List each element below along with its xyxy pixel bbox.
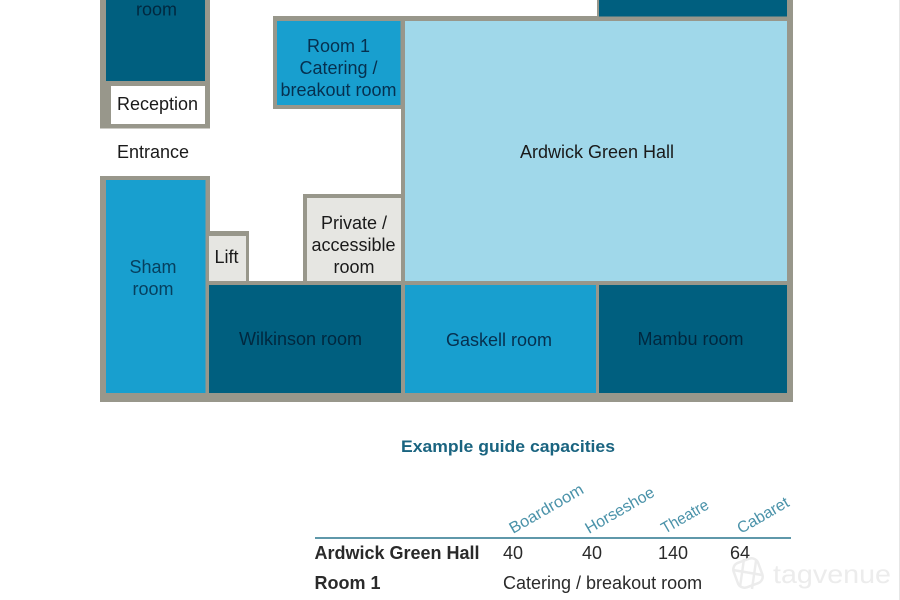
room: mambu xyxy=(599,285,787,393)
room: wilkinson: Wilkinson room xyxy=(239,329,362,349)
room: private accessible: room xyxy=(333,257,375,277)
room: sham xyxy=(106,180,206,393)
row: room 1: Catering / breakout room xyxy=(503,573,702,593)
room: room 1 catering: Room 1 xyxy=(307,36,370,56)
room: ardwick green hall xyxy=(405,21,787,281)
room: ardwick green hall: Ardwick Green Hall xyxy=(520,142,674,162)
room: top-left dark room: room xyxy=(136,0,177,20)
room: reception xyxy=(111,86,205,124)
room: sham: room xyxy=(132,279,174,299)
row: ardwick green hall xyxy=(314,543,750,563)
row: ardwick green hall: 64 xyxy=(730,543,750,563)
room: top-right dark room xyxy=(599,0,787,16)
label: entrance: Entrance xyxy=(117,142,189,162)
room: room 1 catering xyxy=(277,21,400,105)
room: private accessible: Private / xyxy=(321,213,387,233)
column header: theatre: Theatre xyxy=(658,497,712,537)
row: ardwick green hall: 40 xyxy=(582,543,602,563)
watermark: tagvenue xyxy=(731,556,891,590)
column header: horseshoe: Horseshoe xyxy=(582,484,658,537)
row: room 1 xyxy=(314,573,702,593)
room: gaskell xyxy=(405,285,596,393)
room: lift xyxy=(209,236,246,281)
icon: tagvenue logo xyxy=(731,556,765,590)
row: ardwick green hall: 40 xyxy=(503,543,523,563)
row: ardwick green hall: 140 xyxy=(658,543,688,563)
room: gaskell: Gaskell room xyxy=(446,330,552,350)
row: room 1: Room 1 xyxy=(314,573,381,593)
room: sham: Sham xyxy=(129,257,177,277)
room: room 1 catering: Catering / xyxy=(299,58,378,78)
room: private accessible xyxy=(307,198,401,281)
room: private accessible: accessible xyxy=(311,235,396,255)
room: top-left dark room xyxy=(106,0,205,81)
row: ardwick green hall: Ardwick Green Hall xyxy=(314,543,480,563)
room: room 1 catering: breakout room xyxy=(280,80,397,100)
room: wilkinson xyxy=(209,285,401,393)
column header: cabaret: Cabaret xyxy=(734,494,793,537)
column header: boardroom: Boardroom xyxy=(506,481,587,537)
watermark: tagvenue: tagvenue xyxy=(773,559,891,589)
room: lift: Lift xyxy=(214,247,239,267)
heading: example guide capacities: Example guide capacities xyxy=(401,438,615,456)
room: reception: Reception xyxy=(117,94,198,114)
floor plan xyxy=(100,0,793,402)
room: mambu: Mambu room xyxy=(637,329,744,349)
table: capacities xyxy=(314,481,793,593)
